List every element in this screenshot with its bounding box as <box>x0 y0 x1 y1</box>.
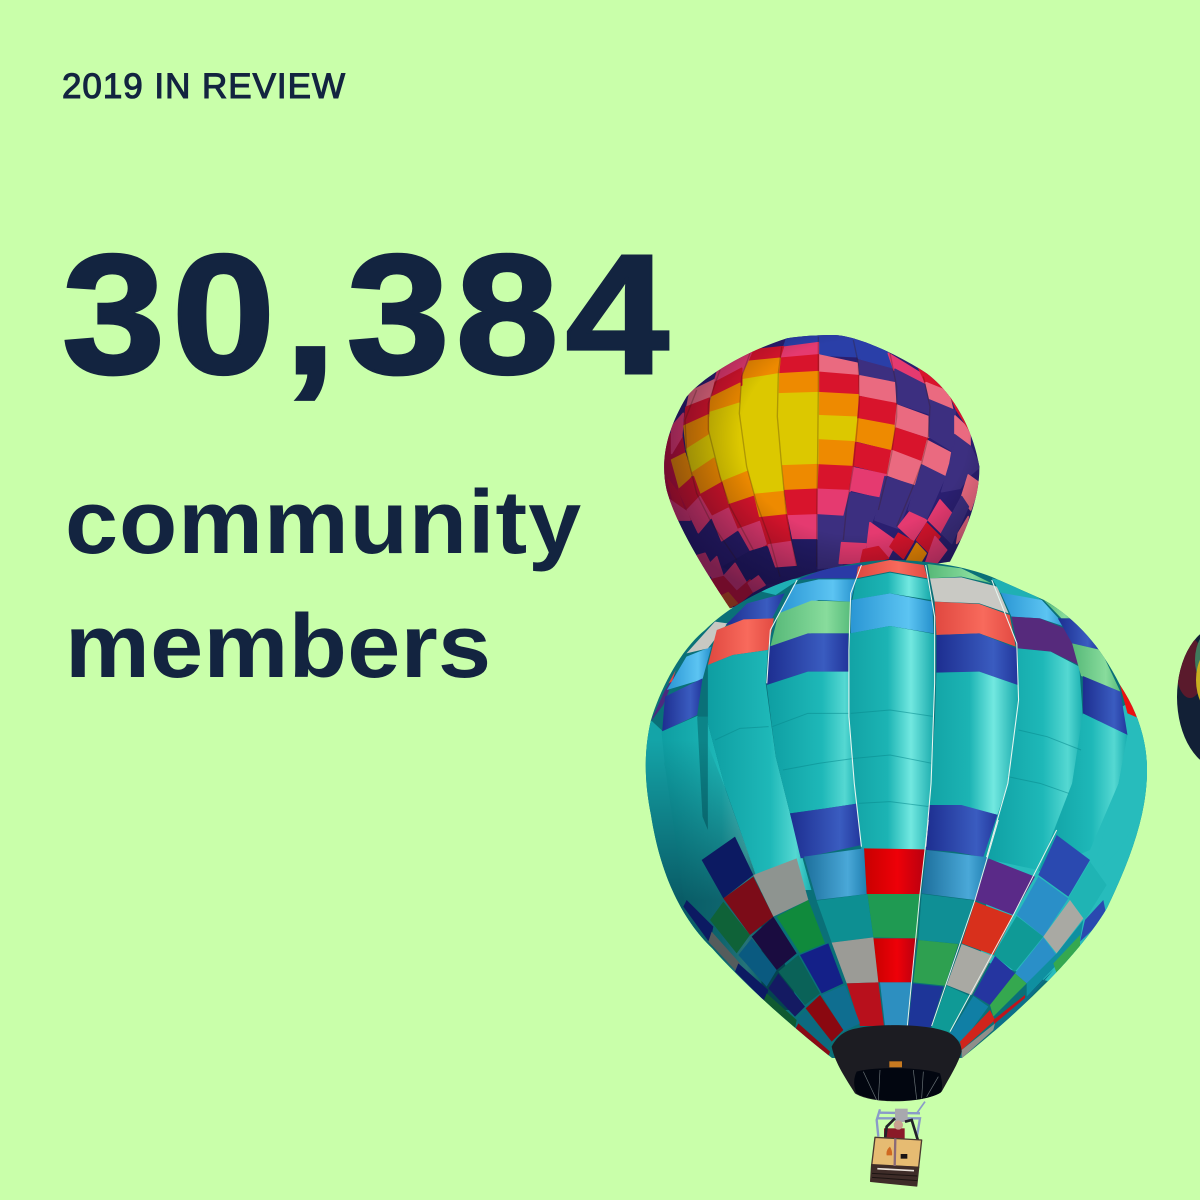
lower panels <box>683 820 1107 1058</box>
gore left 1 <box>783 335 819 346</box>
gore 4 right <box>1108 660 1122 683</box>
label line: community members: community <box>65 471 582 572</box>
gore right 4 <box>918 368 952 400</box>
gore left 3 <box>713 352 752 385</box>
left checker <box>672 453 692 490</box>
basket <box>871 1102 925 1186</box>
gore 3 right <box>1044 600 1070 618</box>
envelope <box>640 555 1160 1065</box>
gore seams <box>685 337 930 577</box>
gore right 5 and 6 <box>955 416 970 446</box>
big turquoise balloon <box>640 555 1160 1186</box>
partial balloon at right edge <box>1177 634 1200 760</box>
gore left 2 <box>747 347 783 363</box>
left edge reds <box>664 432 692 520</box>
seams <box>767 565 1019 870</box>
seams <box>907 820 1057 1032</box>
left checker <box>702 837 753 898</box>
right of center <box>922 850 988 900</box>
upper panels <box>640 560 1151 1017</box>
big number: 30,384: 30,384 <box>62 219 669 409</box>
small-text heading: 2019 in review: 2019 IN REVIEW <box>62 67 345 106</box>
center <box>864 848 925 894</box>
gore center right <box>818 335 858 357</box>
left edge panels <box>646 720 701 936</box>
gore right 3 <box>888 352 926 384</box>
gore 2 right <box>992 578 1042 600</box>
gore right 2 <box>853 338 892 368</box>
gore 2 left <box>761 578 801 595</box>
label line: community members <box>65 471 582 696</box>
lower-left shading <box>646 756 795 1010</box>
center gore <box>856 560 927 578</box>
throat and burner <box>832 1025 962 1186</box>
gore left 4 <box>687 380 714 408</box>
left of center <box>804 848 867 900</box>
red and yellow small balloon <box>653 330 987 613</box>
gore 1 right <box>927 564 992 583</box>
label line: community members: members <box>65 595 491 696</box>
far-left pink <box>672 413 683 453</box>
fabric panel lines <box>715 710 1081 807</box>
gore 1 left <box>797 564 862 580</box>
